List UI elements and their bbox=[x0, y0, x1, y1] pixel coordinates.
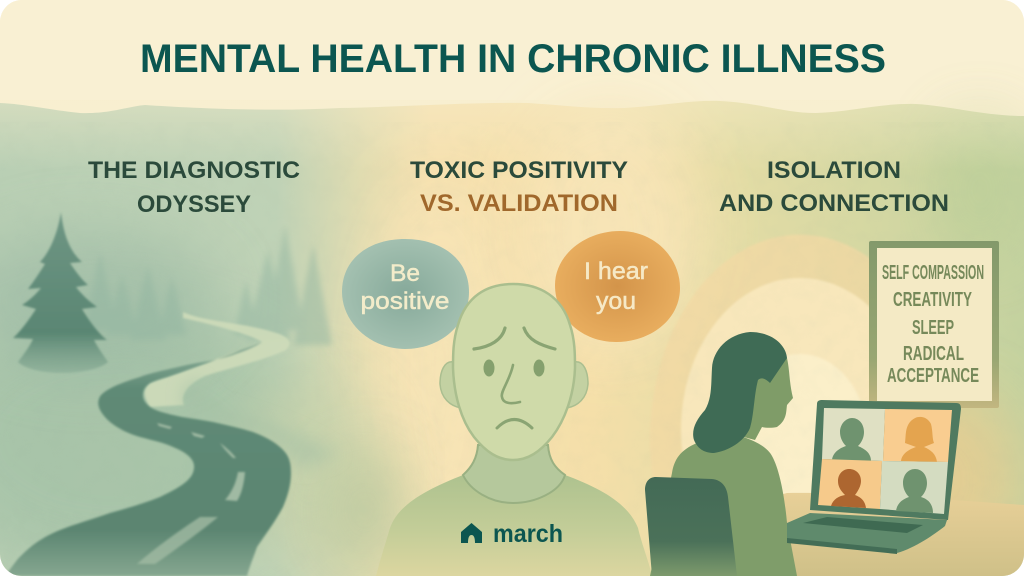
speech bubble: I hear you bbox=[555, 231, 680, 342]
heading: isolation and connection bbox=[719, 157, 949, 217]
speech bubble: Be positive bbox=[342, 239, 469, 349]
speech bubble: Be positive: positive bbox=[360, 288, 450, 315]
heading: the diagnostic odyssey: ODYSSEY bbox=[137, 191, 251, 218]
poster: CREATIVITY bbox=[893, 289, 972, 311]
video tile 4 bbox=[880, 461, 948, 514]
icon: winding road bbox=[5, 312, 340, 576]
ears bbox=[440, 362, 588, 408]
speech bubble: I hear you: you bbox=[596, 288, 636, 315]
heading: toxic positivity vs. validation: TOXIC POSITIVITY bbox=[410, 157, 628, 184]
video tile 1 bbox=[822, 408, 885, 461]
video tile 3 bbox=[818, 459, 882, 509]
misty background trees bbox=[84, 225, 332, 345]
logo: march bbox=[461, 520, 563, 548]
video tile 2 bbox=[883, 409, 952, 462]
body bbox=[650, 437, 797, 576]
desk bbox=[760, 493, 1024, 576]
hair bbox=[693, 332, 787, 453]
speech bubble: Be positive: Be bbox=[390, 260, 420, 287]
heading: isolation and connection: AND CONNECTION bbox=[719, 190, 949, 217]
laptop screen frame bbox=[810, 400, 961, 520]
face features bbox=[474, 328, 555, 428]
logo: march: march bbox=[493, 520, 563, 548]
neck bbox=[463, 445, 565, 503]
title: MENTAL HEALTH IN CHRONIC ILLNESS bbox=[140, 37, 886, 81]
head bbox=[453, 284, 575, 460]
speech bubble: I hear you: I hear bbox=[584, 258, 648, 285]
road dashes bbox=[137, 423, 245, 564]
poster: ACCEPTANCE bbox=[887, 365, 979, 387]
heading: the diagnostic odyssey bbox=[88, 157, 300, 218]
poster: RADICAL bbox=[903, 343, 964, 365]
laptop base bbox=[787, 513, 947, 553]
poster: SLEEP bbox=[912, 317, 954, 339]
chair bbox=[645, 477, 737, 576]
heading: isolation and connection: ISOLATION bbox=[767, 157, 901, 184]
figure: woman seen from behind bbox=[645, 332, 797, 576]
background glow arcs bbox=[650, 235, 950, 576]
icon: pine tree bbox=[13, 212, 108, 373]
heading: the diagnostic odyssey: THE DIAGNOSTIC bbox=[88, 157, 300, 184]
shoulders bbox=[376, 475, 652, 576]
heading: toxic positivity vs. validation: VS. VALIDATION bbox=[420, 190, 618, 217]
heading: toxic positivity vs. validation bbox=[410, 157, 628, 217]
poster bbox=[869, 241, 999, 408]
figure: sad man bbox=[376, 284, 652, 576]
laptop bbox=[787, 400, 961, 554]
face and neck bbox=[740, 358, 793, 440]
